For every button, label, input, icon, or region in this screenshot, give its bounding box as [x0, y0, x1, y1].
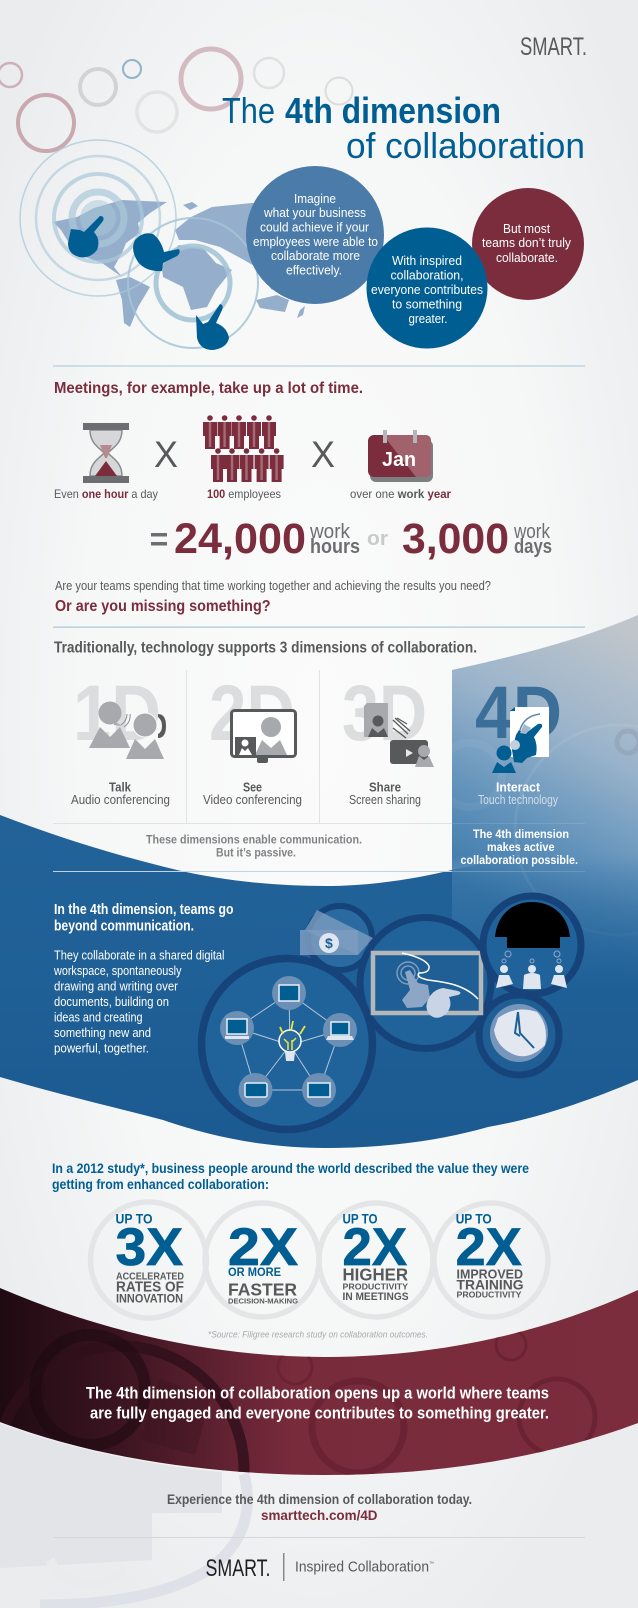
- bubble: but most: teams don’t truly: [482, 235, 571, 250]
- stat: 3X innovation: ACCELERATED: [116, 1270, 184, 1282]
- decorative rings: [0, 49, 352, 151]
- bubble: imagine: could achieve if your: [260, 220, 370, 234]
- title: of collaboration: [346, 125, 585, 166]
- panel: 1D talk: Talk: [109, 780, 131, 794]
- bubble: imagine: Imagine: [294, 191, 336, 206]
- icon: touching hands: [68, 216, 229, 350]
- big numbers: hours: [310, 536, 360, 558]
- panel: 1D talk: 1D: [73, 668, 161, 757]
- closing statement: The 4th dimension of collaboration opens up a world where teams: [86, 1383, 549, 1402]
- text: beyond communication: ideas and creating: [54, 1010, 143, 1024]
- call to action: [167, 1491, 472, 1523]
- stat: 2X productivity in meetings: 2X: [342, 1218, 407, 1277]
- heading: meetings: Meetings, for example, take up a lot of time.: [54, 380, 363, 397]
- active note: The 4th dimension: [473, 829, 569, 841]
- panel: 4D interact: Interact: [496, 780, 541, 794]
- panel: 2D see: Video conferencing: [203, 793, 302, 807]
- icon: calendar: [368, 430, 433, 482]
- question: Are your teams spending that time working together and achieving the results you need?: [55, 579, 491, 593]
- bubble: with inspired: greater.: [408, 311, 448, 326]
- captions: [54, 487, 451, 501]
- panel: 4D interact: [475, 671, 562, 807]
- captions: Even one hour a day: [54, 487, 158, 501]
- bubble: imagine: employees were able to: [253, 234, 378, 249]
- active note: collaboration possible.: [460, 855, 578, 867]
- stat: 2X training: TRAINING: [456, 1276, 524, 1292]
- text: beyond communication: In the 4th dimension, teams go: [54, 901, 234, 918]
- icon: screen sharing: [364, 703, 434, 767]
- passive note: These dimensions enable communication.: [146, 834, 362, 846]
- panel: 4D interact: Touch technology: [478, 793, 559, 807]
- network circle: [202, 958, 372, 1130]
- text: beyond communication: documents, building on: [54, 995, 169, 1009]
- footer logo and tagline: [206, 1553, 434, 1582]
- panel: 3D share: [342, 668, 434, 807]
- text: beyond communication: workspace, spontaneously: [53, 964, 182, 978]
- device nodes: [220, 976, 357, 1107]
- bubble: but most: collaborate.: [496, 250, 558, 265]
- bubble: but most: But most: [503, 221, 550, 236]
- heading: traditional dimensions: Traditionally, technology supports 3 dimensions of collaboration.: [54, 640, 477, 656]
- call to action: Experience the 4th dimension of collaboration today.: [167, 1491, 472, 1507]
- heading: study: In a 2012 study*, business people around the world described the value they were: [52, 1160, 529, 1176]
- closing statement: are fully engaged and everyone contributes to something greater.: [90, 1404, 549, 1423]
- text: beyond communication: beyond communication.: [54, 918, 194, 934]
- title: [222, 90, 585, 166]
- text: beyond communication: something new and: [54, 1026, 151, 1040]
- bubble: imagine: collaborate more: [271, 248, 360, 263]
- red wave: [0, 1288, 638, 1475]
- bubble: imagine: effectively.: [286, 262, 342, 278]
- bubble: with inspired: With inspired: [392, 253, 462, 268]
- icon: audio conference: [89, 702, 166, 759]
- meeting circle: [483, 896, 581, 994]
- big numbers: 3,000: [402, 515, 509, 563]
- stat: 2X faster: 2X: [228, 1218, 298, 1277]
- heading: study: getting from enhanced collaboration:: [52, 1176, 269, 1192]
- title: The: [222, 90, 275, 131]
- text: beyond communication: powerful, together.: [54, 1042, 149, 1056]
- money circle: $: [325, 935, 333, 951]
- stat: 2X training: IMPROVED: [456, 1268, 523, 1282]
- people: [496, 965, 567, 989]
- icon: touch document: [492, 707, 549, 773]
- question callout: Or are you missing something?: [55, 598, 270, 615]
- stat: 2X training: PRODUCTIVITY: [456, 1290, 522, 1300]
- call to action: smarttech.com/4D: [261, 1507, 378, 1523]
- big numbers: work: [309, 521, 351, 543]
- active note: [460, 829, 578, 867]
- icon: employees: [203, 415, 284, 482]
- blue wave: [0, 815, 638, 1148]
- big numbers: or: [367, 528, 388, 550]
- clock circle: [479, 995, 559, 1075]
- panel: 2D see: 2D: [209, 668, 295, 757]
- multiply sign: X: [154, 434, 178, 475]
- stat: 2X faster: FASTER: [228, 1280, 297, 1300]
- source note: *Source: Filigree research study on collaboration outcomes.: [208, 1330, 428, 1340]
- text: beyond communication: [53, 901, 234, 1056]
- panel: 4D backdrop: [452, 615, 638, 958]
- big numbers: 24,000: [174, 515, 306, 563]
- logo: SMART: SMART.: [520, 33, 587, 61]
- stat: 3X innovation: UP TO: [116, 1211, 152, 1226]
- bubble: with inspired: everyone contributes: [371, 282, 483, 297]
- icon: hourglass: [83, 423, 129, 483]
- stat: 2X productivity in meetings: HIGHER: [342, 1265, 408, 1285]
- stat: 2X faster: OR MORE: [228, 1265, 281, 1279]
- stat: 2X training: 2X: [456, 1218, 522, 1277]
- bubble: imagine: [246, 166, 384, 304]
- bubble: but most: [472, 188, 584, 300]
- big numbers: days: [514, 536, 552, 558]
- active note: makes active: [487, 842, 554, 854]
- text: beyond communication: They collaborate in a shared digital: [54, 948, 224, 962]
- icon: video monitor: [232, 710, 296, 763]
- panel: 4D interact: 4D: [475, 671, 562, 754]
- big numbers: work: [513, 521, 551, 543]
- grey gear shapes: [0, 1424, 247, 1605]
- bubble: with inspired: [366, 228, 488, 348]
- heading: study: [52, 1160, 529, 1192]
- icon: light bulb: [279, 1021, 305, 1061]
- text: beyond communication: drawing and writing over: [54, 980, 178, 994]
- passive note: [146, 834, 362, 860]
- big numbers: [151, 515, 552, 563]
- stat: 3X innovation: INNOVATION: [116, 1293, 183, 1305]
- icon: calendar: Jan: [382, 449, 416, 471]
- panel: 1D talk: Audio conferencing: [71, 793, 170, 807]
- stat: 2X productivity in meetings: UP TO: [342, 1211, 378, 1226]
- panel: 3D share: Screen sharing: [349, 793, 421, 807]
- panel: 2D see: [203, 668, 302, 807]
- panel: 1D talk: [71, 668, 170, 807]
- stat: 2X productivity in meetings: [342, 1211, 408, 1303]
- stat: 2X faster: DECISION-MAKING: [228, 1296, 298, 1306]
- stat: 3X innovation: [116, 1211, 184, 1305]
- stat: 3X innovation: 3X: [116, 1218, 183, 1277]
- captions: 100 employees: [207, 487, 281, 501]
- panel: 3D share: Share: [369, 780, 401, 794]
- panel: 2D see: See: [243, 780, 262, 794]
- stat: 2X training: UP TO: [456, 1211, 492, 1226]
- footer logo and tagline: Inspired Collaboration: [295, 1559, 429, 1576]
- continents: [53, 200, 305, 327]
- panel: 3D share: 3D: [342, 668, 427, 757]
- passive note: But it’s passive.: [216, 848, 296, 860]
- target rings, right: [128, 218, 258, 348]
- captions: over one work year: [350, 487, 451, 501]
- multiply sign: X: [311, 434, 335, 475]
- footer logo and tagline: SMART.: [206, 1555, 270, 1582]
- bubble: with inspired: collaboration,: [390, 268, 464, 282]
- stat: 2X productivity in meetings: IN MEETINGS: [342, 1291, 408, 1303]
- stat: 2X productivity in meetings: PRODUCTIVITY: [342, 1282, 408, 1292]
- stat: 2X training: [456, 1211, 524, 1300]
- stat: 3X innovation: RATES OF: [116, 1279, 184, 1296]
- closing statement: [86, 1383, 549, 1423]
- stat rings: [90, 1202, 548, 1318]
- world map with touch targets: [20, 140, 305, 350]
- title: 4th dimension: [285, 90, 501, 131]
- touch screen circle: [360, 918, 491, 1048]
- footer logo and tagline: ™: [429, 1561, 434, 1567]
- stat: 2X faster: [228, 1218, 298, 1306]
- bubble: imagine: what your business: [263, 205, 366, 220]
- bubble: with inspired: to something: [392, 296, 462, 312]
- money circle: [300, 906, 373, 970]
- target rings, left: [20, 140, 176, 296]
